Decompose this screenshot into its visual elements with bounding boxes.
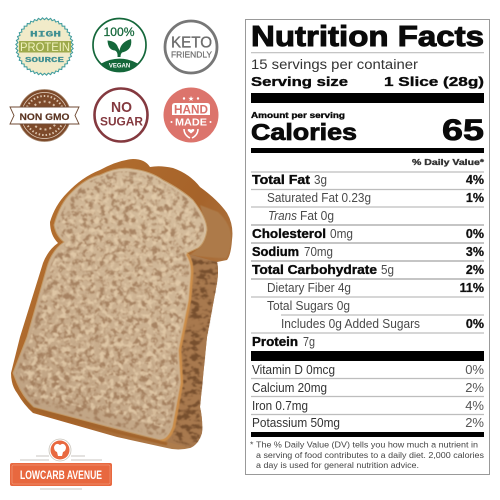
bread top right lower crust bbox=[190, 205, 231, 258]
serving size: Serving size bbox=[251, 74, 348, 89]
row: vitamin d bbox=[252, 362, 484, 377]
badge: keto friendly: KETO bbox=[171, 34, 212, 52]
servings per container: 15 servings per container bbox=[251, 57, 419, 72]
logo: lowcarb avenue: LOWCARB AVENUE bbox=[20, 468, 102, 482]
row: protein: Protein bbox=[252, 335, 298, 349]
bread crumb texture light bbox=[20, 177, 200, 428]
row: iron bbox=[252, 398, 484, 413]
row: saturated fat bbox=[267, 190, 484, 205]
badge: non gmo bbox=[10, 90, 79, 142]
row: sodium bbox=[252, 244, 484, 259]
panel: nutrition facts bbox=[246, 20, 490, 474]
icon: leaf sprout bbox=[108, 39, 131, 57]
row: saturated fat: Saturated Fat 0.23g bbox=[267, 190, 371, 205]
badge: no sugar: NO bbox=[111, 99, 132, 116]
badge: keto friendly: FRIENDLY bbox=[171, 50, 213, 60]
calories bbox=[251, 114, 484, 147]
row: potassium: Potassium 50mg bbox=[252, 415, 340, 430]
badge: 100% vegan bbox=[93, 18, 146, 72]
footnote: * bbox=[250, 440, 254, 450]
footnote: a day is used for general nutrition advice. bbox=[256, 460, 419, 470]
bread bottom crust bbox=[24, 400, 167, 444]
serving size: 1 Slice (28g) bbox=[384, 74, 484, 89]
row: total carbohydrate: 5g bbox=[381, 262, 394, 277]
badge: hand made bbox=[164, 88, 218, 142]
row: cholesterol: 0mg bbox=[330, 226, 353, 241]
row: total carbohydrate bbox=[252, 262, 484, 277]
badge: high protein source bbox=[15, 17, 74, 76]
calories: Calories bbox=[251, 119, 357, 145]
bread crumb face bbox=[13, 168, 207, 440]
row: sodium: Sodium bbox=[252, 245, 299, 259]
serving size bbox=[251, 74, 484, 89]
row: vitamin d: 0% bbox=[465, 362, 484, 377]
bread side texture bbox=[172, 258, 218, 448]
bread crust and side bbox=[11, 159, 232, 450]
badge: 100% vegan: 100% bbox=[104, 25, 135, 39]
row: iron: 4% bbox=[465, 398, 484, 413]
badge: high protein source: SOURCE bbox=[25, 57, 64, 65]
badge: hand made: HAND bbox=[174, 104, 208, 116]
badge: 100% vegan: VEGAN bbox=[109, 64, 130, 70]
bread side bbox=[168, 254, 218, 448]
row: calcium: 2% bbox=[465, 380, 484, 395]
row: saturated fat: 1% bbox=[466, 191, 484, 205]
badge: no sugar: SUGAR bbox=[100, 114, 143, 128]
row: vitamin d: Vitamin D 0mcg bbox=[252, 362, 335, 377]
row: total sugars: Total Sugars 0g bbox=[267, 298, 350, 313]
row: calcium bbox=[252, 380, 484, 395]
badge: non gmo: NON GMO bbox=[20, 112, 70, 123]
row: trans fat: Fat 0g bbox=[300, 208, 334, 223]
daily value header: % Daily Value* bbox=[412, 157, 485, 167]
row: trans fat bbox=[268, 208, 334, 223]
logo: lowcarb avenue bbox=[10, 439, 112, 489]
footnote: a serving of food contributes to a daily diet. 2,000 calories bbox=[256, 450, 485, 460]
row: protein: 7g bbox=[303, 334, 315, 349]
row: dietary fiber: 11% bbox=[460, 281, 484, 295]
badge: high protein source: HIGH bbox=[30, 30, 61, 40]
bread slice bbox=[11, 159, 232, 450]
row: dietary fiber: Dietary Fiber 4g bbox=[267, 280, 351, 295]
row: potassium: 2% bbox=[465, 415, 484, 430]
row: cholesterol: Cholesterol bbox=[252, 227, 326, 241]
bread crumb texture dark bbox=[16, 171, 204, 437]
row: cholesterol bbox=[252, 226, 484, 241]
row: potassium bbox=[252, 415, 484, 430]
badge: keto friendly bbox=[165, 21, 217, 73]
row: protein bbox=[252, 334, 315, 349]
footnote bbox=[250, 440, 485, 470]
heading: nutrition facts: Nutrition Facts bbox=[251, 21, 484, 53]
row: total fat: Total Fat bbox=[252, 173, 311, 187]
row: total fat bbox=[252, 172, 484, 187]
amount per serving: Amount per serving bbox=[251, 111, 345, 120]
badge: no sugar bbox=[94, 88, 148, 142]
badge: hand made: ★ bbox=[188, 95, 194, 103]
row: added sugars: Includes 0g Added Sugars bbox=[281, 316, 420, 331]
row: trans fat: Trans bbox=[268, 208, 297, 223]
row: total carbohydrate: Total Carbohydrate bbox=[252, 263, 377, 277]
row: cholesterol: 0% bbox=[466, 227, 484, 241]
bread crust rim bbox=[160, 254, 192, 441]
row: added sugars: 0% bbox=[466, 317, 484, 331]
icon: hands and heart bbox=[188, 129, 194, 134]
row: total fat: 4% bbox=[466, 173, 484, 187]
row: dietary fiber bbox=[267, 280, 484, 295]
badge: hand made: MADE bbox=[175, 116, 207, 128]
row: total carbohydrate: 2% bbox=[466, 263, 484, 277]
footnote: The % Daily Value (DV) tells you how much a nutrient in bbox=[256, 440, 478, 450]
row: calcium: Calcium 20mg bbox=[252, 380, 327, 395]
row: iron: Iron 0.7mg bbox=[252, 398, 308, 413]
row: total fat: 3g bbox=[314, 172, 327, 187]
row: sodium: 70mg bbox=[304, 244, 333, 259]
badge: high protein source: PROTEIN bbox=[20, 42, 70, 54]
row: sodium: 3% bbox=[466, 245, 484, 259]
calories: 65 bbox=[442, 114, 484, 147]
